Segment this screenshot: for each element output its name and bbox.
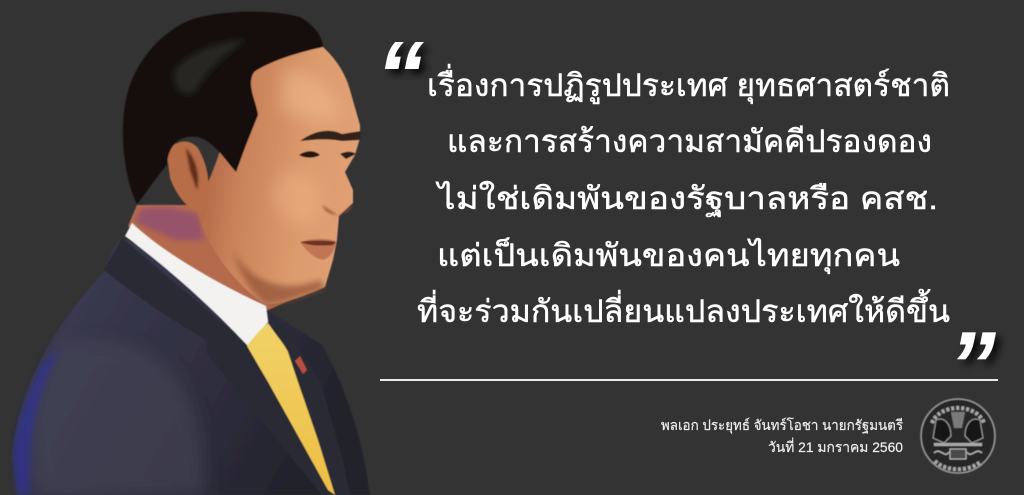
seal scrolls	[934, 451, 982, 454]
government seal	[921, 399, 995, 473]
left lapel	[104, 238, 345, 495]
ear	[167, 142, 209, 212]
neck	[128, 205, 300, 320]
seal arch text band	[932, 408, 984, 423]
seal bottom band	[935, 461, 981, 469]
forehead highlight	[280, 69, 342, 120]
quote text	[417, 64, 950, 329]
seal bar	[934, 443, 982, 446]
jacket highlight	[31, 341, 205, 495]
lip line	[300, 240, 336, 246]
jaw shadow	[232, 250, 325, 304]
necktie	[247, 323, 335, 495]
white collar	[125, 223, 268, 346]
nose shade	[322, 205, 353, 216]
quote line 3: ไม่ใช่เดิมพันของรัฐบาลหรือ คสช.	[435, 181, 938, 217]
eyebrow	[300, 131, 361, 141]
neck blue shade	[135, 207, 204, 240]
seal disc	[921, 399, 995, 473]
date: วันที่ 21 มกราคม 2560	[768, 438, 903, 455]
cheek highlight	[272, 169, 321, 224]
lapel pin	[295, 356, 307, 374]
quote line 2: และการสร้างความสามัคคีปรองดอง	[447, 124, 932, 159]
right lapel	[270, 312, 350, 495]
mouth	[300, 239, 336, 260]
closing quotation mark: ”	[948, 312, 996, 419]
quote line 5: ที่จะร่วมกันเปลี่ยนแปลงประเทศให้ดีขึ้น	[417, 289, 950, 329]
quote line 4: แต่เป็นเดิมพันของคนไทยทุกคน	[437, 237, 900, 275]
opening quotation mark: “	[376, 22, 424, 129]
eye near	[299, 151, 320, 158]
blue rim light	[13, 350, 60, 495]
seal crown	[951, 412, 965, 428]
portrait of the prime minister	[13, 12, 370, 495]
suit jacket	[13, 238, 370, 495]
attribution	[661, 417, 903, 455]
hair	[123, 12, 323, 204]
seal book	[950, 449, 966, 459]
hair sheen	[174, 40, 245, 94]
seal figures	[933, 419, 983, 443]
eye far	[340, 152, 356, 159]
quote line 1: เรื่องการปฏิรูปประเทศ ยุทธศาสตร์ชาติ	[427, 64, 950, 105]
face	[197, 47, 360, 304]
divider line	[380, 379, 998, 381]
inner ear	[186, 148, 198, 190]
speaker name: พลเอก ประยุทธ์ จันทร์โอชา นายกรัฐมนตรี	[661, 417, 903, 434]
